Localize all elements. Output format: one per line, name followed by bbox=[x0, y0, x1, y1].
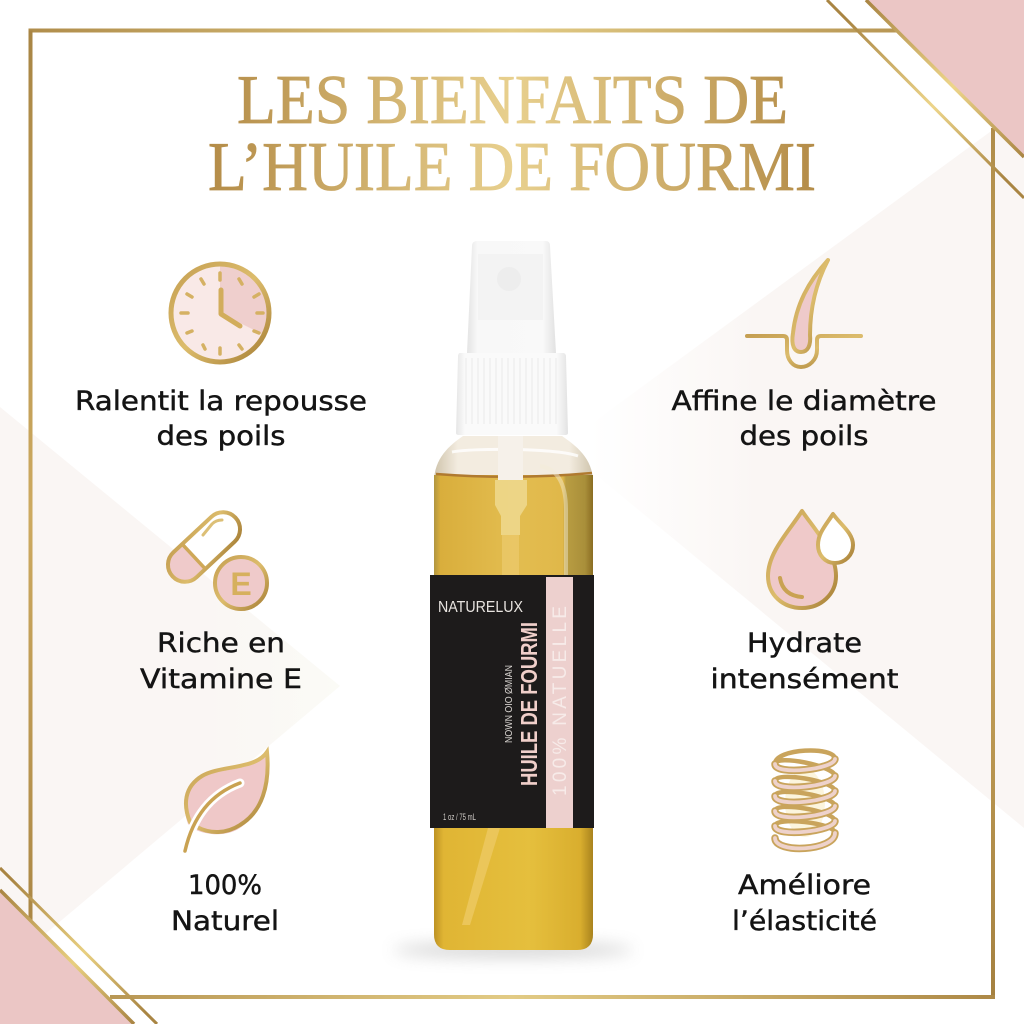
text: naturel: Naturel bbox=[171, 906, 279, 937]
text: affine: Affine le diamètre bbox=[672, 386, 936, 417]
text: naturel: 100% bbox=[188, 870, 262, 901]
spray nozzle bbox=[467, 241, 556, 353]
text: naturel bbox=[171, 870, 279, 937]
text: hydrate bbox=[710, 628, 898, 695]
background: left pale panel bbox=[0, 407, 340, 972]
text: ralentit: des poils bbox=[156, 421, 286, 452]
bottle bbox=[393, 241, 633, 957]
icon: capsule with vitamin E: E bbox=[230, 566, 252, 602]
text: affine bbox=[672, 386, 936, 452]
icon: hair follicle bbox=[747, 260, 861, 367]
text: hydrate: intensément bbox=[710, 664, 898, 695]
text: elasticite: l’élasticité bbox=[732, 906, 877, 937]
icon: water drops bbox=[768, 511, 853, 608]
volume: 1 oz / 75 mL bbox=[443, 812, 476, 823]
text: affine: des poils bbox=[740, 421, 868, 452]
title: LES BIENFAITS DE bbox=[237, 62, 788, 139]
corner: bottom left pink triangle bbox=[0, 890, 133, 1024]
title bbox=[208, 62, 816, 206]
icon: spring bbox=[775, 750, 835, 848]
text: elasticite: Améliore bbox=[738, 870, 871, 901]
icon: capsule with vitamin E bbox=[161, 505, 267, 609]
title: L’HUILE DE FOURMI bbox=[208, 129, 816, 206]
100% natuelle: 100% NATUELLE bbox=[550, 606, 571, 796]
small vertical text: NOWN OIO ØMIAN bbox=[504, 665, 515, 743]
dip tube bbox=[462, 436, 527, 925]
text: vitamine: Riche en bbox=[157, 628, 285, 659]
text: elasticite bbox=[732, 870, 877, 937]
text: ralentit: Ralentit la repousse bbox=[75, 386, 367, 417]
icon: clock bbox=[171, 264, 269, 362]
pink strip bbox=[546, 577, 573, 828]
label bbox=[430, 575, 594, 828]
ribbed collar bbox=[456, 353, 568, 435]
text: ralentit bbox=[75, 386, 367, 452]
text: vitamine bbox=[140, 628, 302, 695]
product name: HUILE DE FOURMI bbox=[516, 622, 542, 786]
background: right pale panel bbox=[561, 107, 1024, 828]
text: vitamine: Vitamine E bbox=[140, 664, 302, 695]
brand: NATURELUX bbox=[438, 599, 523, 616]
bottle body bbox=[434, 436, 593, 950]
text: hydrate: Hydrate bbox=[747, 628, 862, 659]
bottle shadow bbox=[393, 943, 633, 957]
icon: leaf bbox=[185, 752, 268, 852]
corner: top right pink triangle bbox=[866, 0, 1024, 157]
